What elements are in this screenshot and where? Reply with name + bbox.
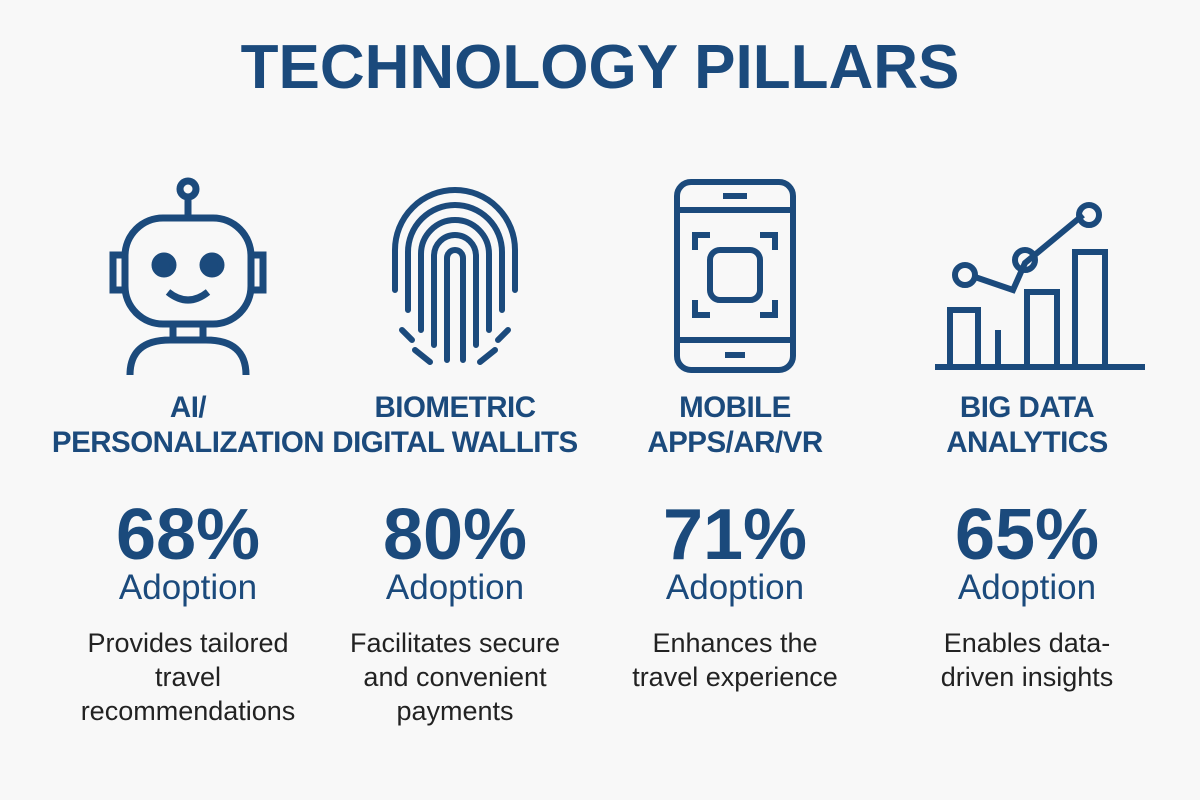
panel: big data	[935, 202, 1145, 692]
description: payments	[396, 696, 514, 726]
panel: AI: Adoption	[119, 568, 257, 607]
icon: chart	[935, 202, 1145, 370]
description	[632, 628, 838, 692]
description	[941, 628, 1113, 692]
label	[332, 391, 578, 459]
icon: robot	[110, 178, 266, 375]
label: MOBILE	[679, 391, 791, 424]
label: ANALYTICS	[946, 426, 1108, 459]
description: driven insights	[941, 662, 1113, 692]
label: DIGITAL WALLITS	[332, 426, 578, 459]
description: travel experience	[632, 662, 838, 692]
label: AI/	[170, 391, 206, 424]
label: APPS/AR/VR	[647, 426, 823, 459]
panel: biometric: Adoption	[386, 568, 524, 607]
stat: 68%	[116, 495, 260, 575]
description: Enhances the	[652, 628, 818, 658]
panel: mobile: Adoption	[666, 568, 804, 607]
description: recommendations	[81, 696, 295, 726]
panel: AI	[52, 178, 324, 726]
description: and convenient	[363, 662, 547, 692]
stat: 80%	[383, 495, 527, 575]
label: BIG DATA	[960, 391, 1094, 424]
label	[946, 391, 1108, 459]
description: Provides tailored	[87, 628, 289, 658]
panel: big data: Adoption	[958, 568, 1096, 607]
description	[81, 628, 295, 726]
description: Enables data-	[944, 628, 1110, 658]
stat: 71%	[663, 495, 807, 575]
description: travel	[155, 662, 221, 692]
panel: mobile	[632, 179, 838, 692]
label: BIOMETRIC	[374, 391, 536, 424]
label: PERSONALIZATION	[52, 426, 324, 459]
label	[52, 391, 324, 459]
icon: phone	[674, 179, 796, 373]
label	[647, 391, 823, 459]
title: TECHNOLOGY PILLARS	[241, 33, 959, 102]
panel: biometric	[332, 187, 578, 726]
description: Facilitates secure	[350, 628, 560, 658]
description	[350, 628, 560, 726]
icon: fingerprint	[392, 187, 518, 365]
stat: 65%	[955, 495, 1099, 575]
